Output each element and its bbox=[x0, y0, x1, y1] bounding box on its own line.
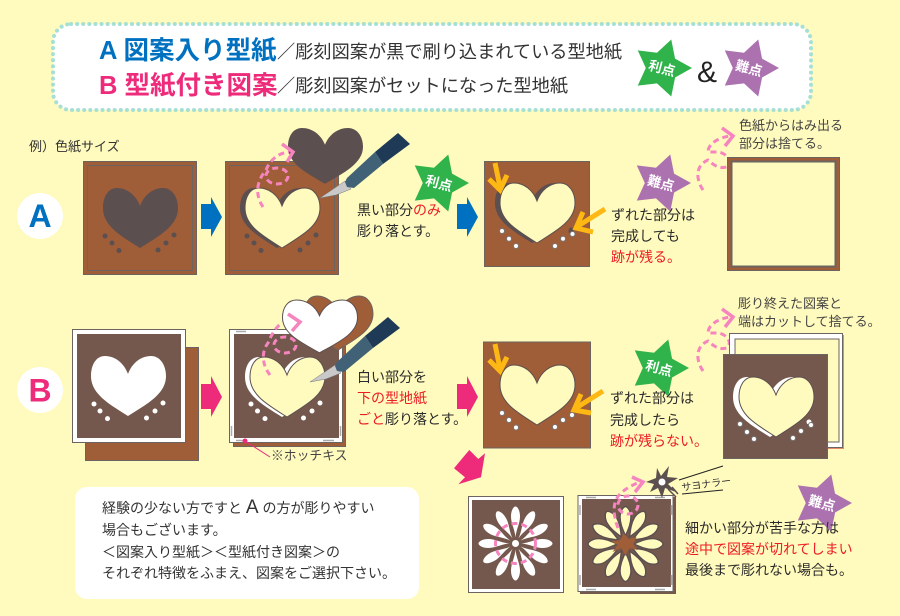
badge: difficulty A bbox=[626, 146, 697, 215]
panel: flower pattern bbox=[468, 496, 564, 592]
icon: flying centre piece bbox=[646, 466, 678, 498]
panel: B result bbox=[724, 334, 844, 458]
arrow: B step 1 to 2 bbox=[201, 376, 222, 417]
panel: advice note bbox=[75, 487, 419, 599]
badge: advantage B: 利点 bbox=[644, 358, 674, 379]
badge: advantage B bbox=[624, 331, 695, 400]
text: A discard: 部分は捨てる。 bbox=[739, 136, 830, 151]
heading: B type: B 型紙付き図案 bbox=[99, 72, 278, 100]
badge: advantage bbox=[627, 31, 698, 100]
label: A bbox=[17, 193, 63, 239]
text: advice: それぞれ特徴をふまえ、図案をご選択下さい。 bbox=[102, 565, 396, 581]
text: A step 3: 完成しても bbox=[611, 228, 680, 244]
badge: advantage A bbox=[404, 146, 475, 215]
badge: advantage: 利点 bbox=[647, 58, 677, 79]
text: advice: 場合もございます。 bbox=[102, 522, 227, 538]
arrow: A step 1 to 2 bbox=[201, 197, 222, 237]
text: flower note: 細かい部分が苦手な方は bbox=[685, 520, 839, 536]
label: B bbox=[17, 367, 63, 413]
staple pointer bbox=[242, 438, 270, 457]
badge: advantage A: 利点 bbox=[424, 173, 454, 194]
text: B step 3: 跡が残らない。 bbox=[610, 433, 708, 449]
panel: A step 3 bbox=[484, 162, 605, 266]
dashed arrow: broken centre bbox=[614, 477, 643, 528]
text: B step 2: ごと彫り落とす。 bbox=[357, 411, 467, 427]
text: flower note: 最後まで彫れない場合も。 bbox=[685, 562, 853, 578]
caption: sayonara bbox=[679, 466, 732, 494]
text: B step 3: ずれた部分は bbox=[610, 390, 694, 406]
dashed arrow: A discard bbox=[698, 128, 733, 190]
dashed arrow: lift out bbox=[258, 144, 293, 207]
arrow: B step 2 to 3 bbox=[457, 376, 478, 417]
removed heart pieces bbox=[282, 296, 373, 353]
badge: difficulty flower bbox=[787, 466, 858, 535]
panel: B step 2 bbox=[230, 296, 400, 457]
text: A step 3: ずれた部分は bbox=[611, 207, 695, 223]
text: B description: ／彫刻図案がセットになった型地紙 bbox=[277, 76, 568, 96]
panel: A step 2 bbox=[226, 128, 410, 274]
note: size example: 例）色紙サイズ bbox=[29, 139, 120, 154]
arrow: diagonal to flower bbox=[454, 450, 485, 484]
icon: craft knife bbox=[310, 317, 400, 382]
heading: A type: A 図案入り型紙 bbox=[99, 37, 277, 65]
panel: B step 1 bbox=[72, 330, 198, 460]
ampersand: & bbox=[697, 56, 717, 89]
badge: difficulty A: 難点 bbox=[646, 172, 677, 194]
dashed arrow: lift out bbox=[263, 314, 300, 375]
text: A discard: 色紙からはみ出る bbox=[739, 118, 843, 133]
panel: A result frame bbox=[728, 158, 840, 270]
panel: B step 3 bbox=[484, 342, 603, 448]
label: B: B bbox=[28, 372, 52, 408]
staple marks bbox=[580, 498, 672, 590]
text: B step 2: 白い部分を bbox=[357, 369, 427, 385]
text: flower note: 途中で図案が切れてしまい bbox=[685, 541, 853, 557]
panel: A step 1 bbox=[84, 162, 196, 274]
arrows: aligned spots bbox=[489, 344, 603, 413]
panel: flower cut failure bbox=[578, 466, 732, 594]
text: B discard: 端はカットして捨てる。 bbox=[738, 314, 881, 329]
arrows: misaligned spots bbox=[489, 163, 605, 232]
text: A step 3: 跡が残る。 bbox=[611, 249, 681, 265]
dashed arrow: B discard bbox=[698, 309, 733, 371]
removed heart piece bbox=[288, 128, 363, 184]
text: A description: ／彫刻図案が黒で刷り込まれている型地紙 bbox=[277, 42, 622, 62]
text: A step 2: 黒い部分のみ bbox=[357, 202, 441, 218]
staple marks bbox=[232, 332, 340, 440]
text: B step 2: 下の型地紙 bbox=[357, 390, 427, 406]
badge: difficulty flower: 難点 bbox=[807, 492, 838, 514]
label: staple note: ※ホッチキス bbox=[271, 448, 347, 463]
icon: craft knife bbox=[320, 133, 410, 198]
arrow: A step 2 to 3 bbox=[457, 197, 478, 237]
text: B discard: 彫り終えた図案と bbox=[738, 296, 842, 311]
text: B step 3: 完成したら bbox=[610, 412, 680, 428]
text: A step 2: 彫り落とす。 bbox=[357, 223, 439, 239]
label: A: A bbox=[28, 198, 52, 234]
badge: difficulty: 難点 bbox=[734, 57, 765, 79]
caption: sayonara: サヨナラー bbox=[681, 475, 732, 494]
badge: difficulty bbox=[714, 31, 785, 100]
text: advice: ＜図案入り型紙＞＜型紙付き図案＞の bbox=[102, 544, 340, 560]
panel: header legend bbox=[53, 24, 811, 110]
text: advice: 経験の少ない方ですと A の方が彫りやすい bbox=[102, 497, 374, 518]
